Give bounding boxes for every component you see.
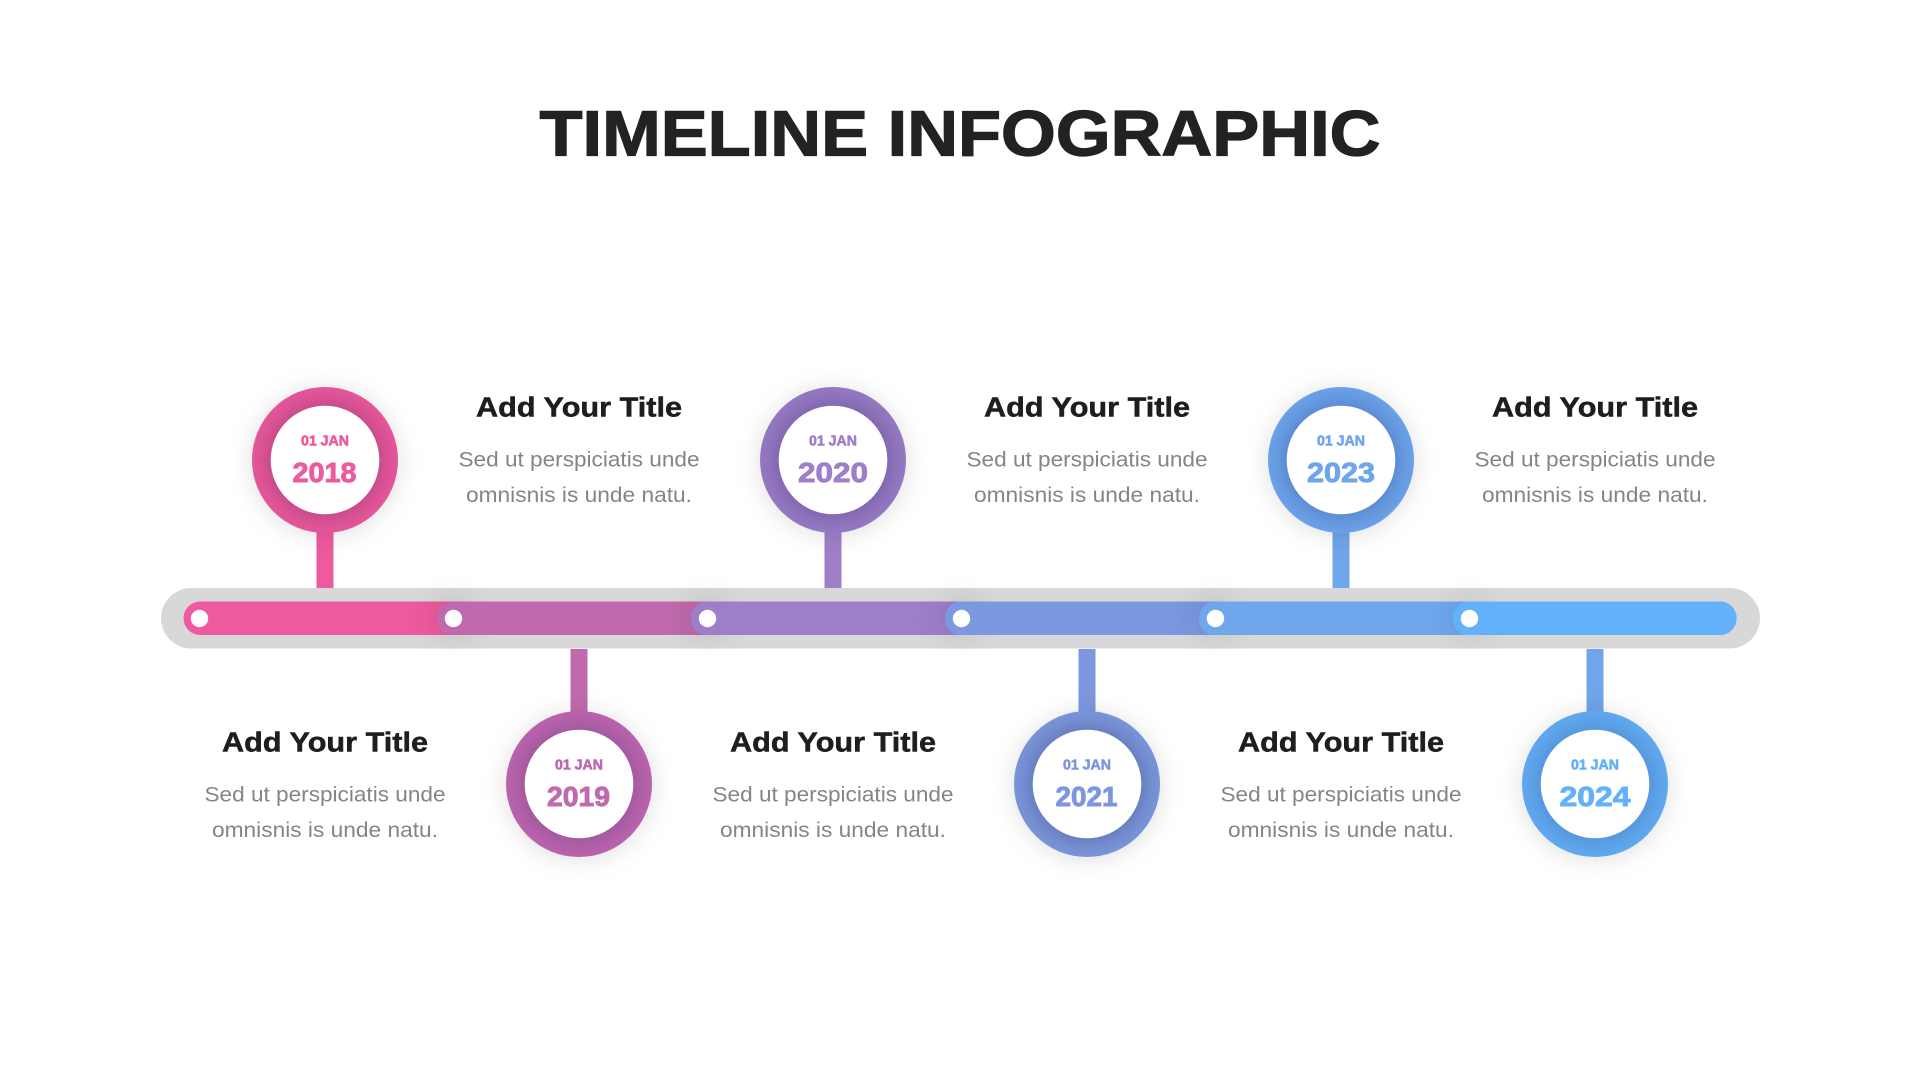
text: bottom title 2023 [1220, 726, 1462, 842]
title: TIMELINE INFOGRAPHIC [540, 98, 1380, 170]
text: top title 2024 [1474, 392, 1716, 507]
text: bottom title 2020: Sed ut perspiciatis unde [712, 784, 954, 806]
milestone 2023 [1268, 387, 1414, 588]
milestone 2021: 01 JAN [1063, 758, 1111, 774]
text: bottom title 2018: omnisnis is unde natu. [212, 819, 438, 842]
milestone 2024 [1522, 649, 1668, 857]
text: top title 2021: omnisnis is unde natu. [974, 484, 1200, 507]
timeline infographic canvas [161, 110, 1760, 866]
text: bottom title 2018: Add Your Title [222, 726, 428, 758]
text: bottom title 2020: Add Your Title [730, 726, 936, 758]
milestone 2019 [506, 649, 652, 857]
milestone 2023: 2023 [1307, 457, 1375, 488]
text: top title 2019: omnisnis is unde natu. [466, 484, 692, 507]
milestone 2020 [760, 387, 906, 588]
text: top title 2019 [458, 392, 700, 507]
text: top title 2021: Sed ut perspiciatis unde [966, 448, 1208, 472]
text: bottom title 2020: omnisnis is unde natu. [720, 819, 946, 842]
text: top title 2019: Add Your Title [476, 392, 682, 422]
text: bottom title 2023: Add Your Title [1238, 726, 1444, 758]
milestone 2021 [1014, 649, 1160, 857]
milestone 2024: 2024 [1560, 781, 1631, 812]
text: top title 2019: Sed ut perspiciatis unde [458, 448, 700, 472]
milestone 2019: 01 JAN [555, 758, 603, 774]
text: bottom title 2023: omnisnis is unde natu. [1228, 819, 1454, 842]
milestone 2018: 2018 [292, 457, 356, 488]
timeline dots [191, 610, 1478, 627]
milestone 2021: 2021 [1056, 781, 1118, 812]
text: top title 2021: Add Your Title [984, 392, 1190, 422]
text: top title 2024: Add Your Title [1492, 392, 1698, 422]
text: bottom title 2020 [712, 726, 954, 842]
text: bottom title 2018: Sed ut perspiciatis unde [204, 784, 446, 806]
milestone 2019: 2019 [547, 781, 610, 812]
text: bottom title 2018 [204, 726, 446, 842]
timeline bar [161, 588, 1760, 648]
text: top title 2021 [966, 392, 1208, 507]
milestone 2020: 01 JAN [809, 434, 857, 450]
milestone 2018 [252, 387, 398, 588]
milestone 2023: 01 JAN [1317, 434, 1365, 450]
text: top title 2024: Sed ut perspiciatis unde [1474, 448, 1716, 472]
milestone 2018: 01 JAN [301, 434, 349, 450]
text: top title 2024: omnisnis is unde natu. [1482, 484, 1708, 507]
milestone 2020: 2020 [798, 457, 868, 488]
milestone 2024: 01 JAN [1571, 758, 1619, 774]
text: bottom title 2023: Sed ut perspiciatis unde [1220, 784, 1462, 806]
